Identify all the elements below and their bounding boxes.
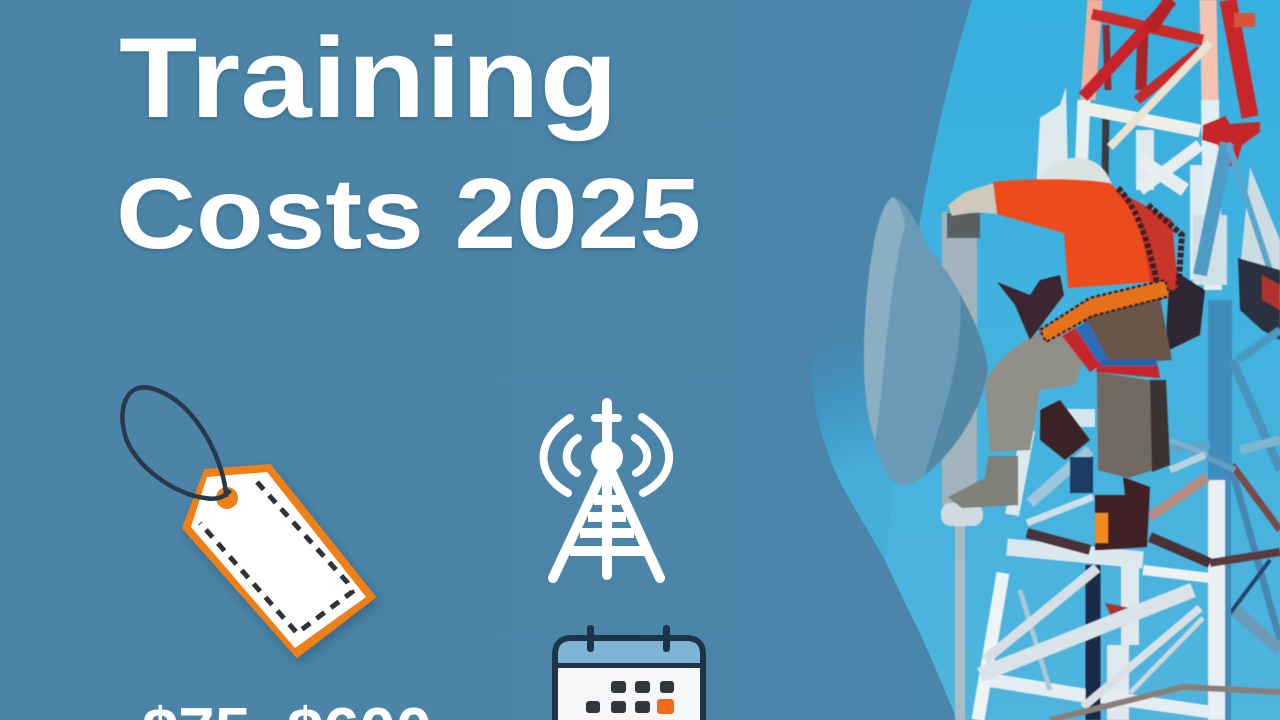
highlighted day	[657, 699, 674, 714]
signal waves	[543, 417, 669, 493]
front leg	[1097, 372, 1170, 478]
calendar page	[555, 638, 703, 720]
antenna panels	[1036, 87, 1068, 190]
faded transition beside dish	[811, 233, 950, 560]
icon: calendar	[555, 625, 703, 720]
dish face	[864, 197, 905, 440]
calendar day squares	[586, 681, 674, 713]
rear leg	[985, 325, 1095, 452]
front boot	[1095, 477, 1150, 550]
tower rungs	[570, 500, 644, 551]
tower legs	[553, 467, 660, 578]
pole	[942, 212, 977, 505]
helmet	[1038, 158, 1112, 185]
hips	[1070, 298, 1172, 365]
upper tower legs	[1081, 0, 1213, 290]
jacket back shade	[1112, 188, 1178, 290]
dish rear	[864, 197, 988, 485]
pole collar	[941, 503, 983, 526]
dark gear on harness	[997, 275, 1064, 340]
safety harness chain	[1118, 188, 1182, 300]
lower tower diagonals	[980, 418, 1280, 720]
pole cap	[947, 213, 980, 238]
tag stitching	[200, 482, 352, 633]
icon: price tag	[122, 387, 375, 657]
title line one: Training	[119, 15, 618, 142]
lower tower white members	[978, 480, 1228, 720]
dish shaded edge	[925, 295, 988, 475]
orange waist belt	[1040, 280, 1170, 342]
calendar divider	[555, 663, 703, 668]
title	[116, 15, 701, 270]
arm and hand	[948, 183, 997, 216]
calendar rings	[587, 625, 594, 652]
technician	[948, 158, 1182, 550]
rear boot	[948, 456, 1018, 508]
tag string loop	[122, 387, 230, 499]
front leg shadow	[1150, 380, 1170, 472]
tag body	[183, 465, 375, 657]
tag hole	[216, 487, 238, 509]
red top bracing	[1083, 0, 1255, 117]
tag white face	[191, 472, 366, 648]
calendar header	[558, 641, 700, 663]
blue right tower members	[1165, 143, 1280, 650]
dark centre post	[1086, 565, 1100, 720]
dish antenna and pole	[864, 197, 988, 720]
jacket	[993, 179, 1152, 288]
white mid bracing	[1083, 43, 1210, 280]
sky shape	[885, 0, 1280, 720]
mast and crossbar	[602, 403, 612, 575]
red clamp	[1202, 116, 1260, 166]
lattice tower	[978, 0, 1280, 720]
red flag on tower	[1105, 603, 1130, 618]
photo: technician climbing telecom tower	[811, 0, 1280, 720]
title line two: Costs 2025	[116, 158, 701, 270]
blue and red leg straps	[1062, 328, 1100, 372]
tower beacon	[591, 441, 623, 473]
icon: radio tower	[543, 403, 669, 578]
